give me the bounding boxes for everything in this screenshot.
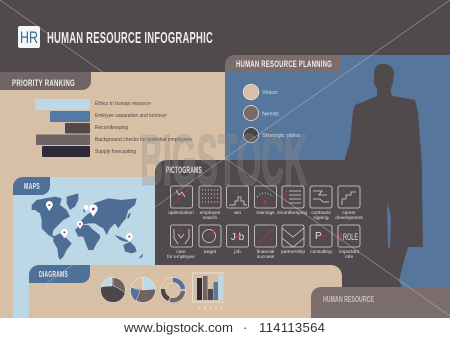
ranking labels: Ethics in human resource [95,101,151,107]
icon: consulting [310,225,332,255]
icon: financial success: success [257,255,275,260]
bar chart [192,273,225,310]
ranking labels: Background checks for potential employees [95,137,192,143]
heading: human resource planning [225,55,342,72]
bar chart: C [210,306,212,310]
icon: contracts signing [310,186,332,221]
stock site footer: www.bigstock.com [123,320,233,335]
icon: financial success [254,225,276,260]
icon: important role: ROLE [343,232,358,242]
stock site footer [123,320,325,335]
title: HUMAN RESOURCE INFOGRAPHIC [47,30,213,47]
heading: pictograms: PICTOGRAMS [166,165,202,175]
donut chart [160,278,186,302]
icon: optimization [168,186,194,216]
icon: win: win [234,210,241,216]
bar chart: D [215,306,218,310]
heading: priority ranking: PRIORITY RANKING [12,78,75,89]
heading: maps [13,177,50,195]
bar chart: E [220,306,224,310]
icon: consulting: P [315,231,322,242]
world map [32,193,143,260]
icon: trainings: trainings [256,210,275,216]
heading: human resource planning: HUMAN RESOURCE PLANNING [236,59,332,70]
gap between arm and body [387,203,391,248]
icon: important role: important [339,249,360,255]
panel: pictograms background [155,160,395,287]
logo: HR: HR [20,28,38,47]
stock site footer: 114113564 [259,320,325,335]
icon: care for employee: care [176,249,186,255]
icon: consulting: consulting [310,249,332,255]
heading: maps: MAPS [24,182,40,191]
icon: optimization: optimization [168,210,194,216]
heading: priority ranking [0,72,91,90]
heading: diagrams [29,265,90,283]
icon: career development [335,186,363,221]
icon: partnership [281,225,305,255]
ranking bars [35,99,90,157]
pictogram grid [167,186,363,260]
icon: contracts signing: contracts [311,210,331,216]
icon: care for employee: for employee [167,254,195,260]
panel: maps [13,177,155,318]
icon: win [226,186,248,216]
icon: important role [338,225,360,260]
icon: partnership: partnership [281,249,305,255]
icon: recordkeeping [277,186,308,216]
icon: financial success: financial [257,249,274,255]
tan background panel [0,72,226,318]
pie chart 2 [130,277,156,302]
icon: job: J b [231,232,245,243]
icon: contracts signing: signing [313,215,329,221]
planning list: Needs [262,112,279,118]
panel: human resource planning background [225,55,450,318]
bar chart: B [204,306,207,310]
heading: diagrams: DIAGRAMS [39,269,68,279]
pie chart 1 [100,278,126,302]
panel: human resource footer: HUMAN RESOURCE [323,295,374,304]
panel: human resource footer [311,287,450,318]
icon: employee search: search [203,215,218,221]
bar chart: A [198,306,201,310]
ranking labels: Recordkeeping [95,125,128,131]
icon: trainings [254,186,276,216]
planning list: Vision [262,90,278,96]
panel: diagrams background [29,265,342,318]
ranking labels [95,101,192,155]
planning list [243,84,300,142]
icon: target: target [204,249,217,255]
businessman silhouette with briefcase [345,64,423,287]
dark header band [0,0,450,75]
panel: priority ranking [0,72,192,157]
icon: job: job [233,249,241,255]
stock site footer: · [243,320,247,335]
icon: recordkeeping: recordkeeping [277,210,308,216]
icon: important role: role [345,254,353,260]
planning list: Strategic plans [262,133,300,139]
icon: care for employee [167,225,195,260]
icon: job [226,225,248,255]
icon: employee search: employee [200,210,221,216]
icon: target [199,225,221,255]
icon: employee search [199,186,221,221]
ranking labels: Emloyee separation and turnover [95,113,167,119]
map pins [46,201,133,242]
ranking labels: Supply forecasting [95,149,136,155]
icon: career development: development [335,215,363,221]
icon: career development: career [342,210,356,216]
logo: HR [18,26,40,48]
